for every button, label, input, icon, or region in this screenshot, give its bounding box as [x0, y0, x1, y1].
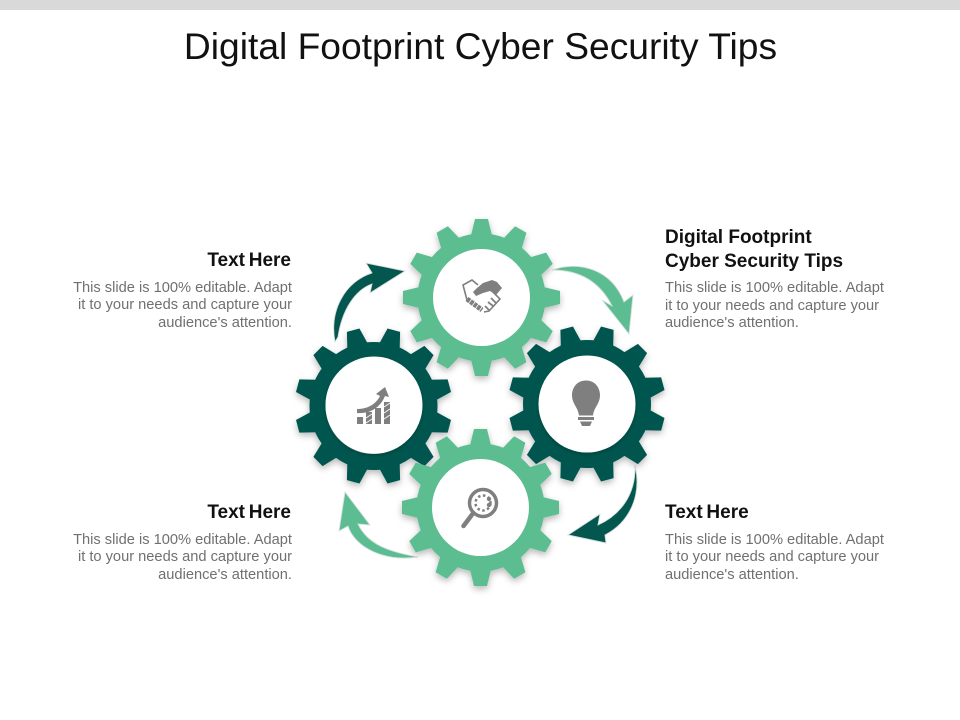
text block: top right: audience's attention.	[665, 315, 799, 331]
text block: bottom right: This slide is 100% editable. Adapt	[665, 532, 884, 548]
text block: bottom left: it to your needs and capture your	[78, 549, 292, 565]
arrow: green top-right	[552, 266, 633, 334]
text block: top left	[73, 250, 292, 331]
text block: bottom right: it to your needs and capture your	[665, 549, 879, 565]
gear: left dark	[277, 310, 470, 502]
gear hole: bottom	[432, 459, 529, 556]
text block: bottom right: audience's attention.	[665, 567, 799, 583]
text block: top left: it to your needs and capture your	[78, 297, 292, 313]
icon: growth chart	[357, 387, 390, 424]
text block: bottom left	[73, 502, 292, 583]
text block: bottom right	[665, 502, 884, 583]
gear hole: left	[326, 356, 422, 454]
text block: bottom left: Text Here	[207, 502, 291, 523]
icon: light bulb	[572, 380, 600, 426]
text block: top left: audience's attention.	[158, 315, 292, 331]
arrow: dark top-left	[334, 263, 405, 342]
text block: bottom right: Text Here	[665, 502, 749, 523]
text block: top right: it to your needs and capture your	[665, 298, 879, 314]
gear hole: right	[538, 356, 636, 452]
text block: top right: This slide is 100% editable. Adapt	[665, 280, 884, 296]
text block: top right	[665, 227, 884, 331]
text block: top right: Cyber Security Tips	[665, 250, 843, 272]
title: Digital Footprint Cyber Security Tips	[184, 25, 777, 67]
arrow: green bottom-left	[339, 492, 418, 558]
icon: magnifier	[464, 490, 496, 526]
arrow: dark bottom-right	[568, 465, 637, 543]
gear hole: top	[433, 249, 530, 346]
text block: bottom left: This slide is 100% editable. Adapt	[73, 532, 292, 548]
text block: bottom left: audience's attention.	[158, 567, 292, 583]
gear: bottom green	[402, 429, 559, 586]
gear: top green	[403, 219, 560, 376]
gear: right dark	[491, 308, 683, 500]
icon: handshake	[463, 280, 502, 312]
text block: top right: Digital Footprint	[665, 227, 812, 248]
text block: top left: This slide is 100% editable. Adapt	[73, 280, 292, 296]
text block: top left: Text Here	[207, 250, 291, 271]
